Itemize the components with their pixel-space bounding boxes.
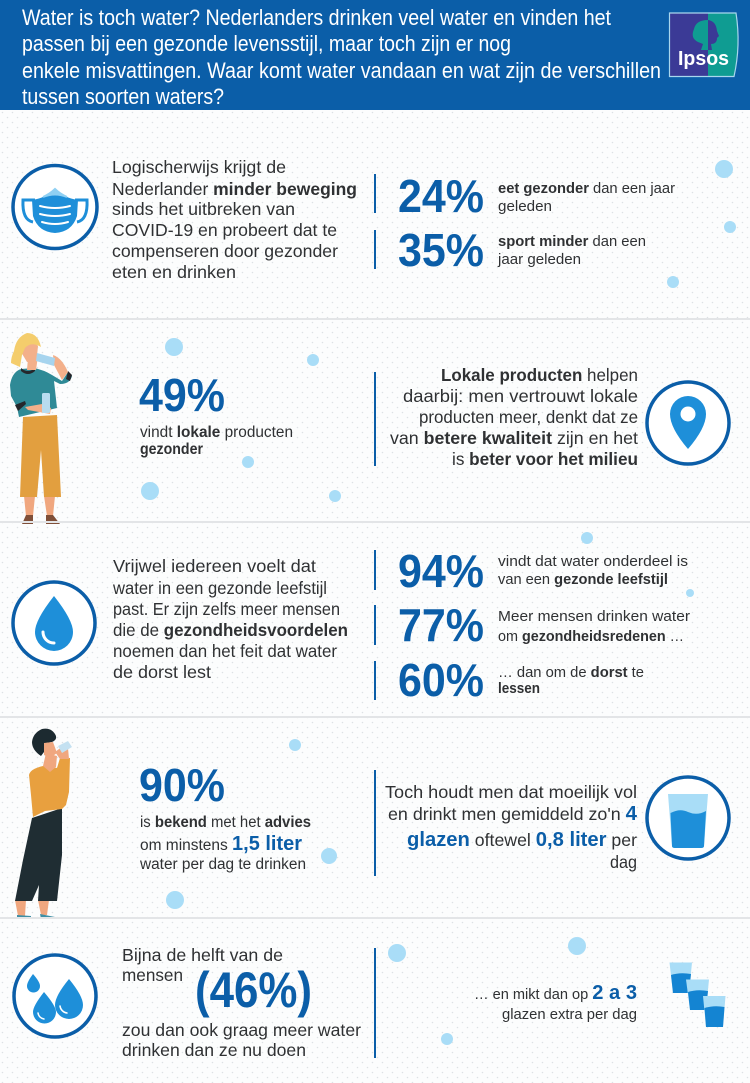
panel: beweging — [13, 157, 675, 282]
text block: minder beweging: Logischerwijs krijgt de — [112, 157, 286, 177]
text block: 0,8 liter per dag: dag — [610, 852, 637, 872]
stat: 60% — [398, 654, 644, 706]
panel: lokale producten — [10, 333, 729, 524]
text block: 0,8 liter per dag: glazen oftewel 0,8 liter per — [407, 829, 637, 851]
stat: 24%: geleden — [498, 199, 552, 215]
text block: 2 a 3 glazen — [474, 982, 637, 1023]
text block: minder beweging: eten en drinken — [112, 262, 236, 282]
stat: 90%: is bekend met het advies — [140, 814, 311, 831]
text block: minder beweging: compenseren door gezonder — [112, 241, 338, 261]
stat: 60%: lessen — [498, 681, 540, 697]
icon: location pin — [647, 382, 729, 464]
stat: 49%: vindt lokale producten — [140, 424, 293, 441]
stat: 35%: 35% — [398, 224, 484, 276]
panel: meer water drinken — [14, 937, 726, 1060]
text block: minder beweging: Nederlander minder beweging — [112, 179, 357, 199]
stat: 90% — [139, 759, 311, 873]
text block: minder beweging — [112, 157, 357, 282]
icon: face mask — [13, 166, 97, 248]
title: passen bij een gezonde levensstijl, maar toch zijn er nog — [22, 31, 511, 56]
panel: advies 1,5 liter — [15, 729, 729, 919]
text block: 46%: drinken dan ze nu doen — [122, 1040, 306, 1060]
stat: 77%: om gezondheidsredenen … — [498, 629, 684, 645]
text block: lokale producten: is beter voor het milieu — [452, 449, 638, 469]
stat: 90%: water per dag te drinken — [139, 856, 306, 873]
stat: 60%: … dan om de dorst te — [498, 665, 644, 681]
logo: Ipsos — [670, 13, 738, 76]
text block: gezondheidsvoordelen: past. Er zijn zelfs meer mensen — [113, 599, 340, 619]
dots — [166, 739, 337, 909]
text block: 46%: zou dan ook graag meer water — [122, 1020, 361, 1040]
icon: three drops — [14, 955, 96, 1037]
stat: 24%: 24% — [398, 170, 484, 222]
illustration: man drinking — [15, 729, 72, 919]
text block: gezondheidsvoordelen: de dorst lest — [113, 662, 211, 682]
title: Water is toch water? Nederlanders drinken veel water en vinden het — [22, 5, 611, 30]
stat: 90%: 90% — [139, 759, 225, 811]
icon: three glasses — [670, 962, 726, 1027]
text block: lokale producten — [390, 365, 638, 469]
text block: gezondheidsvoordelen: water in een gezonde leefstijl — [112, 578, 327, 598]
dots: top panels — [581, 160, 736, 597]
text block: 2 a 3 glazen: … en mikt dan op 2 a 3 — [474, 982, 637, 1004]
stat: 94%: 94% — [398, 545, 484, 597]
text block: 46% — [122, 945, 361, 1060]
stat: 49%: gezonder — [140, 441, 203, 458]
text block: minder beweging: sinds het uitbreken van — [112, 199, 295, 219]
title: tussen soorten waters? — [22, 84, 224, 109]
stat: 24%: eet gezonder dan een jaar — [498, 181, 675, 197]
header banner — [0, 0, 750, 110]
text block: lokale producten: Lokale producten helpen — [441, 365, 638, 385]
stat: 24% — [398, 170, 675, 222]
text block: gezondheidsvoordelen: Vrijwel iedereen voelt dat — [113, 556, 316, 576]
text block: gezondheidsvoordelen — [112, 556, 348, 682]
stat: 35% — [398, 224, 646, 276]
stat: 49% — [139, 369, 293, 458]
stat: 94%: van een gezonde leefstijl — [498, 572, 668, 588]
text block: 2 a 3 glazen: glazen extra per dag — [502, 1007, 637, 1023]
text block: 46%: Bijna de helft van de — [122, 945, 283, 965]
stat: 94%: vindt dat water onderdeel is — [498, 554, 688, 570]
text block: 0,8 liter per dag: en drinkt men gemiddeld zo'n 4 — [388, 803, 638, 825]
text block: lokale producten: daarbij: men vertrouwt lokale — [403, 386, 638, 406]
stat: 35%: jaar geleden — [497, 252, 581, 268]
stat: 77%: 77% — [398, 599, 484, 651]
text block: lokale producten: van betere kwaliteit zijn en het — [390, 428, 638, 448]
logo: Ipsos: Ipsos — [678, 48, 729, 70]
stat: 77%: Meer mensen drinken water — [498, 609, 690, 625]
stat: 94% — [398, 545, 688, 597]
title — [22, 5, 661, 109]
title: enkele misvattingen. Waar komt water vandaan en wat zijn de verschillen — [22, 58, 661, 83]
dots — [141, 338, 341, 502]
panel: gezonde leefstijl — [13, 545, 690, 706]
stat: 35%: sport minder dan een — [498, 234, 646, 250]
icon: glass of water — [647, 777, 729, 859]
stat: 77% — [398, 599, 690, 651]
stat: 60%: 60% — [398, 654, 484, 706]
text block: lokale producten: producten meer, denkt dat ze — [419, 407, 638, 427]
stat: 49%: 49% — [139, 369, 225, 421]
text block: gezondheidsvoordelen: noemen dan het feit dat water — [113, 641, 337, 661]
text block: 0,8 liter per dag — [385, 782, 638, 872]
text block: 46%: (46%) — [195, 962, 312, 1018]
text block: 0,8 liter per dag: Toch houdt men dat moeilijk vol — [385, 782, 637, 802]
stat: 90%: om minstens 1,5 liter — [140, 833, 302, 855]
illustration: woman drinking — [10, 333, 72, 524]
dots — [388, 937, 586, 1045]
text block: gezondheidsvoordelen: die de gezondheidsvoordelen — [113, 620, 348, 640]
text block: 46%: mensen — [122, 965, 183, 985]
text block: minder beweging: COVID-19 en probeert dat te — [112, 220, 337, 240]
icon: water drop — [13, 582, 95, 664]
